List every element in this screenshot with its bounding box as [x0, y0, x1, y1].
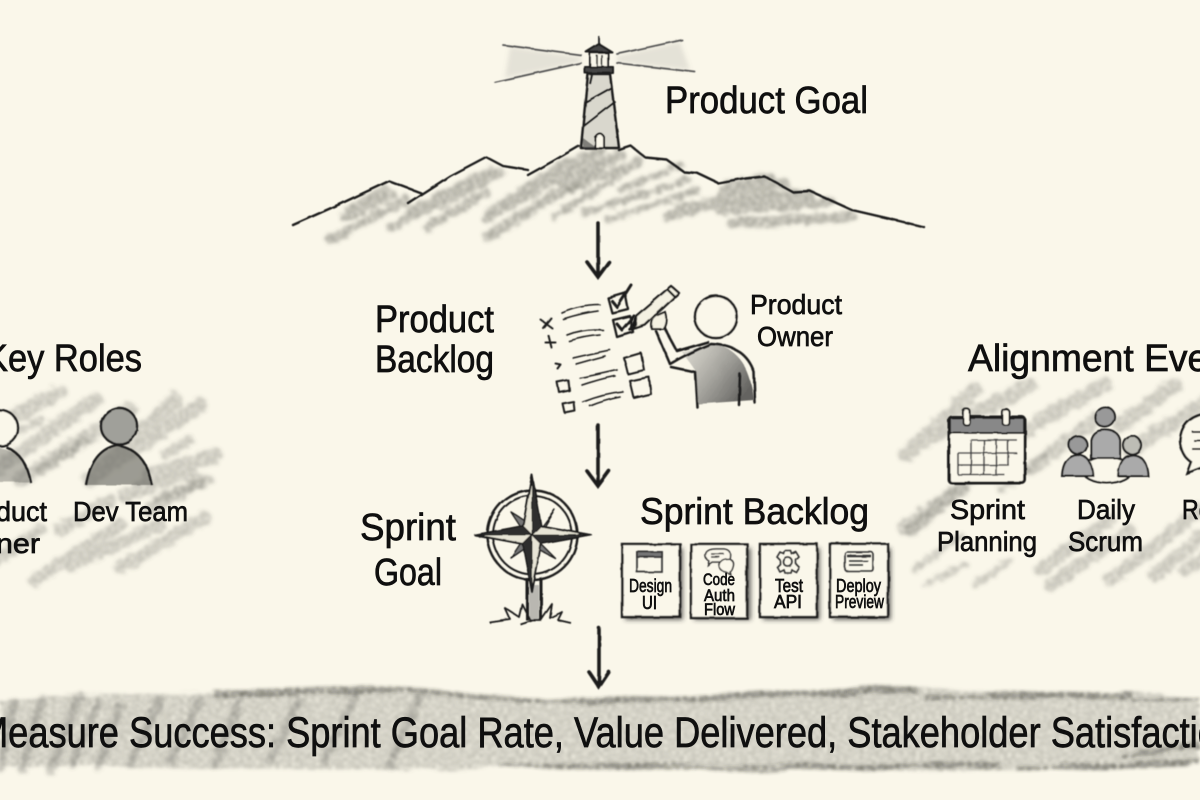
label: Product Owner (left) [0, 496, 47, 559]
label: Daily Scrum: Scrum [1068, 526, 1143, 557]
panel: key roles [0, 338, 215, 580]
label: Product Owner: Product [750, 289, 842, 320]
shading: roles scribble [0, 392, 215, 580]
panel: measure success band [0, 688, 1200, 772]
heading: Sprint Goal [360, 507, 456, 594]
card: Design UI: Design [629, 576, 672, 596]
heading: Product Backlog [375, 299, 494, 381]
title: Product Goal: Product Goal [665, 80, 868, 122]
arrow: backlog to sprint [587, 425, 609, 486]
card: Code Auth Flow [691, 544, 751, 620]
card: Deploy Preview: Preview [835, 592, 885, 612]
panel: product backlog [375, 285, 842, 413]
label: Sprint Planning: Sprint [950, 494, 1025, 525]
label: Product Owner: Owner [757, 321, 833, 352]
label: Sprint Planning [937, 494, 1037, 557]
icon: compass on post [475, 475, 591, 624]
card: Test API: Test [775, 576, 803, 596]
icon: light rays [505, 42, 690, 78]
card: Test API [760, 544, 820, 620]
label: Product Owner [750, 289, 842, 352]
arrow: goal to backlog [587, 223, 609, 277]
icon: review speech bubble [1180, 413, 1200, 473]
panel: product goal lighthouse [293, 36, 924, 240]
card: Deploy Preview [830, 544, 891, 620]
card: Deploy Preview: Deploy [836, 576, 881, 596]
icon: mountain shading [330, 150, 852, 240]
label: Dev Team: Dev Team [73, 496, 188, 527]
panel: alignment events [905, 338, 1200, 585]
card: Code Auth Flow: Flow [704, 600, 736, 619]
icon: daily scrum group [1062, 407, 1148, 483]
card: Design UI: UI [642, 593, 657, 613]
icon: dev team person [86, 408, 152, 485]
panel: sprint goal [360, 475, 591, 624]
shading: band scribble [0, 688, 1200, 772]
icon: product owner figure [652, 296, 755, 407]
label: Daily Scrum: Daily [1077, 494, 1135, 525]
icon: lighthouse [581, 36, 619, 148]
heading: Product Backlog: Product [375, 299, 494, 341]
label: Daily Scrum [1068, 494, 1143, 557]
card: Test API: API [774, 592, 802, 612]
card: Code Auth Flow: Auth [704, 586, 735, 605]
icon: product owner person [0, 410, 31, 483]
arrow: sprint to measure [589, 628, 609, 687]
heading: Sprint Goal: Goal [374, 552, 442, 594]
panel: sprint backlog [622, 491, 891, 620]
card: Code Auth Flow: Code [703, 570, 735, 589]
icon: pencil [630, 286, 679, 330]
shading: events scribble [905, 385, 1200, 585]
icon: checklist [541, 285, 651, 413]
icon: calendar [949, 409, 1025, 483]
heading: Sprint Goal: Sprint [360, 507, 456, 549]
card: Design UI [622, 544, 683, 620]
icon: mountain outline [293, 146, 924, 227]
heading: Sprint Backlog: Sprint Backlog [640, 491, 869, 532]
label: Sprint Planning: Planning [937, 526, 1037, 557]
heading: Product Backlog: Backlog [375, 339, 494, 381]
